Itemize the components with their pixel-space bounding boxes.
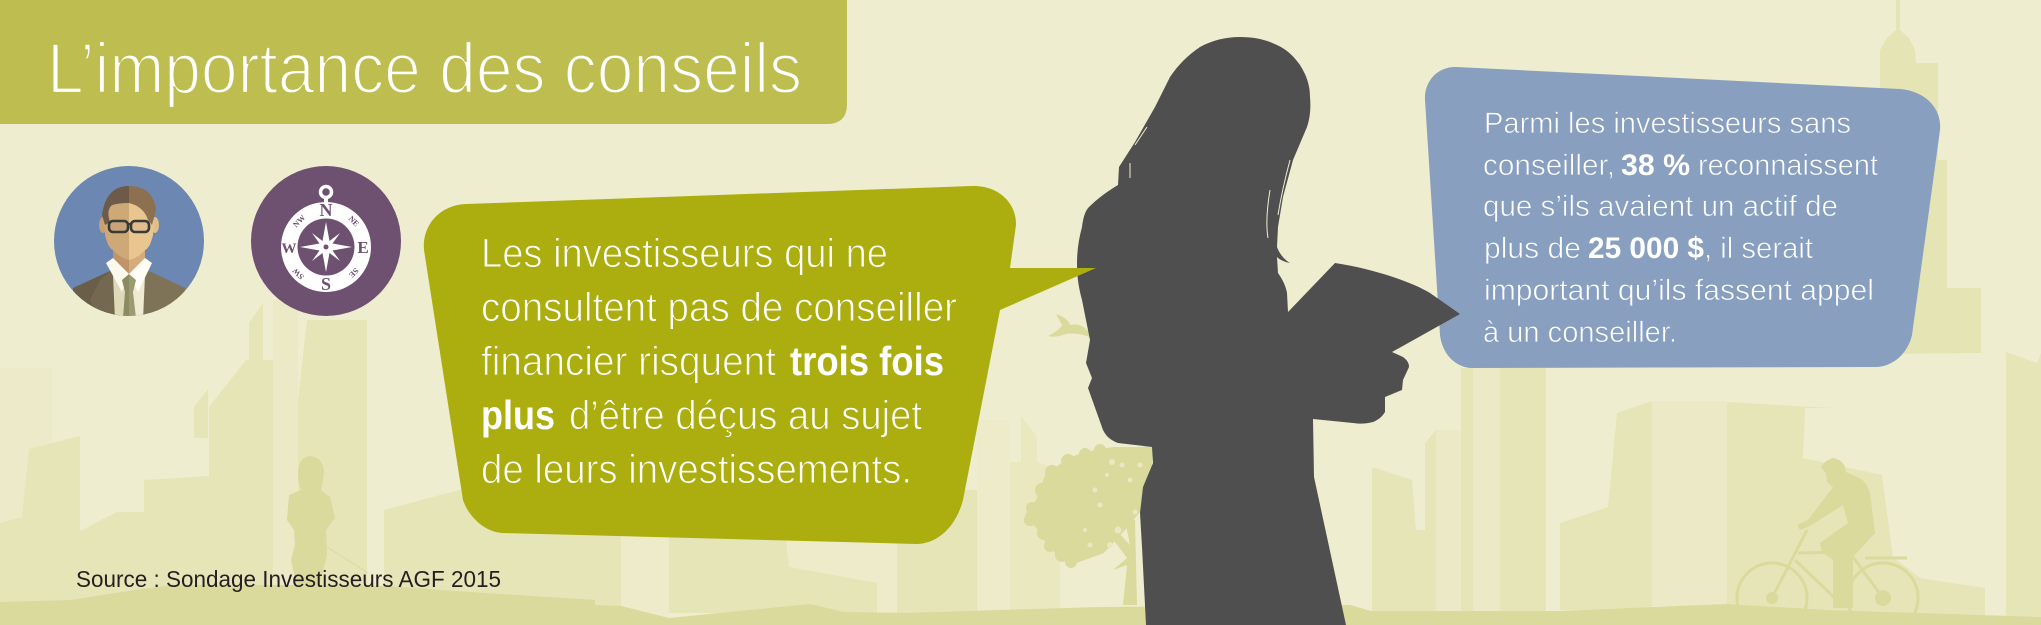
icon: compass: SW xyxy=(291,266,306,281)
speech bubble: green xyxy=(424,186,1096,544)
blue bubble text: important qu’ils fassent appel xyxy=(1484,274,1874,307)
blue bubble text: 38 % xyxy=(1621,149,1690,182)
tree xyxy=(1024,444,1153,605)
green bubble text: financier risquent xyxy=(481,338,777,384)
icon: compass: W xyxy=(282,241,296,257)
green bubble text xyxy=(481,230,957,492)
blue bubble text: à un conseiller. xyxy=(1483,316,1677,349)
tree highlights xyxy=(1083,459,1142,548)
blue bubble text: conseiller, xyxy=(1483,149,1615,182)
blue bubble text: 25 000 $ xyxy=(1588,232,1704,265)
source note: Source : Sondage Investisseurs AGF 2015 xyxy=(76,566,501,592)
icon: compass: N xyxy=(320,200,332,220)
title banner xyxy=(0,0,847,124)
bird xyxy=(1048,314,1092,338)
icon: compass: NE xyxy=(347,214,361,228)
blue bubble text: que s’ils avaient un actif de xyxy=(1483,190,1838,223)
icon: compass: NW xyxy=(291,213,307,229)
icon: compass: S xyxy=(321,274,331,294)
blue bubble text: plus de xyxy=(1484,232,1581,265)
walker silhouette xyxy=(287,456,368,590)
green bubble text: Les investisseurs qui ne xyxy=(481,230,888,276)
icon: compass xyxy=(251,166,401,316)
blue bubble text: reconnaissent xyxy=(1698,149,1879,182)
icon: compass: E xyxy=(357,238,369,257)
green bubble text: trois fois xyxy=(790,338,944,384)
green bubble text: consultent pas de conseiller xyxy=(481,284,957,330)
cyclist xyxy=(1737,458,1918,625)
skyline: right buildings xyxy=(1010,0,2041,620)
blue bubble text xyxy=(1483,107,1879,349)
woman silhouette with book xyxy=(1077,37,1460,625)
green bubble text: plus xyxy=(481,392,555,438)
blue bubble text: , il serait xyxy=(1704,232,1814,265)
ground xyxy=(0,585,2041,625)
green bubble text: d’être déçus au sujet xyxy=(569,392,923,438)
title: L’importance des conseils xyxy=(47,30,802,109)
skyline: left buildings xyxy=(0,300,1009,620)
blue bubble text: Parmi les investisseurs sans xyxy=(1484,107,1851,140)
speech bubble: blue xyxy=(1425,67,1940,368)
icon: compass: SE xyxy=(347,266,360,279)
icon: advisor portrait xyxy=(54,166,204,320)
green bubble text: de leurs investissements. xyxy=(481,446,912,492)
